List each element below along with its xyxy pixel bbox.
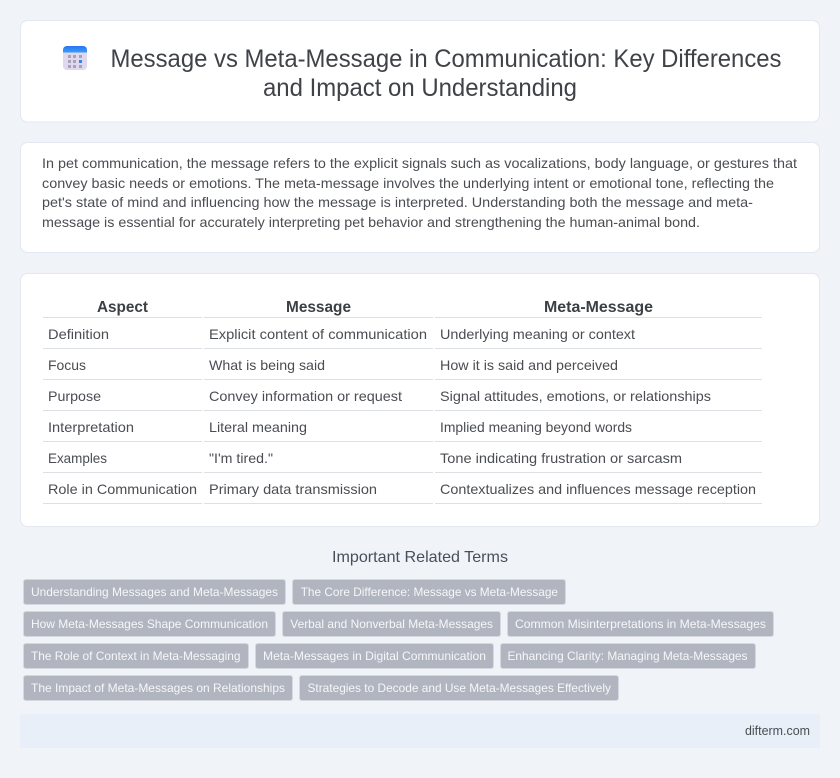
tag: [24, 676, 292, 700]
tag: Strategies to Decode and Use Meta-Messages Effectively: [308, 681, 611, 695]
tag: [508, 612, 774, 636]
tag: The Role of Context in Meta-Messaging: [31, 649, 240, 663]
row: interpretation: Interpretation: [48, 419, 134, 435]
related term tags: [24, 580, 774, 700]
row: examples: [43, 450, 762, 472]
tag: [500, 644, 756, 668]
row: role in communication: Primary data transmission: [209, 481, 377, 497]
tag: [24, 580, 286, 604]
row: focus: What is being said: [209, 357, 325, 373]
intro paragraph: convey basic needs or emotions. The meta-message involves the underlying intent or emotional tone, reflecting the: [42, 175, 774, 191]
row: definition: Explicit content of communication: [209, 326, 427, 342]
row: interpretation: Implied meaning beyond words: [440, 419, 632, 435]
row: interpretation: [43, 419, 762, 442]
footer bar: [20, 714, 820, 748]
title: [110, 45, 782, 102]
tag: Verbal and Nonverbal Meta-Messages: [290, 617, 493, 631]
heading: important related terms: Important Related Terms: [332, 549, 508, 566]
intro paragraph: pet's state of mind and influencing how the message is interpreted. Understanding both the message and meta-: [42, 194, 753, 210]
row: definition: Definition: [48, 326, 109, 342]
footer site name: difterm.com: [745, 723, 810, 738]
table header: Meta-Message: [544, 299, 653, 316]
tag: Enhancing Clarity: Managing Meta-Messages: [508, 649, 748, 663]
tag: Meta-Messages in Digital Communication: [263, 649, 486, 663]
header panel: [20, 20, 820, 122]
row: role in communication: [43, 481, 762, 504]
title: and Impact on Understanding: [263, 74, 577, 102]
row: purpose: Purpose: [48, 388, 101, 404]
row: focus: [43, 357, 762, 380]
row: examples: Tone indicating frustration or sarcasm: [440, 450, 682, 466]
row: examples: "I'm tired.": [209, 450, 273, 466]
row: focus: How it is said and perceived: [440, 357, 618, 373]
row: definition: Underlying meaning or context: [440, 326, 635, 342]
row: role in communication: Contextualizes and influences message reception: [440, 481, 756, 497]
row: examples: Examples: [48, 450, 107, 466]
tag: [300, 676, 618, 700]
tag: The Impact of Meta-Messages on Relationships: [31, 681, 285, 695]
row: purpose: Convey information or request: [209, 388, 402, 404]
intro paragraph: [42, 155, 797, 230]
panel: intro text: [20, 142, 820, 252]
table header: Aspect: [97, 299, 149, 316]
tag: [282, 612, 500, 636]
table header: [43, 299, 762, 318]
tag: [24, 612, 276, 636]
row: purpose: Signal attitudes, emotions, or relationships: [440, 388, 711, 404]
tag: How Meta-Messages Shape Communication: [31, 617, 268, 631]
tag: Common Misinterpretations in Meta-Messages: [515, 617, 766, 631]
tag: [24, 644, 248, 668]
table header: Message: [286, 299, 351, 316]
row: interpretation: Literal meaning: [209, 419, 307, 435]
tag: Understanding Messages and Meta-Messages: [31, 585, 278, 599]
tag: [292, 580, 566, 604]
icon: calendar: [63, 46, 87, 70]
row: role in communication: Role in Communication: [48, 481, 197, 497]
intro paragraph: message is essential for accurately interpreting pet behavior and strengthening the human-animal bond.: [42, 214, 700, 230]
row: definition: [43, 326, 762, 348]
row: focus: Focus: [48, 357, 86, 373]
panel: comparison table: [20, 274, 820, 526]
row: purpose: [43, 388, 762, 410]
title: Message vs Meta-Message in Communication: Key Differences: [110, 45, 782, 73]
intro paragraph: In pet communication, the message refers to the explicit signals such as vocalizations, body language, or gestures that: [42, 155, 797, 171]
tag: The Core Difference: Message vs Meta-Message: [301, 585, 558, 599]
tag: [256, 644, 494, 668]
